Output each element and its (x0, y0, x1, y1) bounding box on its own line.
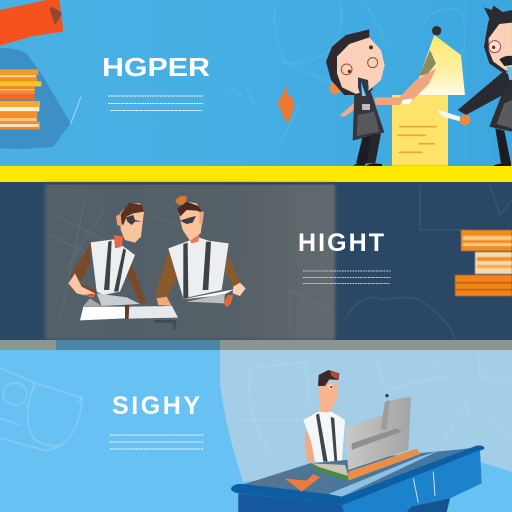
panel: top section background (0, 0, 512, 167)
characters: two men reading (68, 196, 246, 330)
body (489, 80, 512, 132)
character: right person (437, 5, 512, 166)
text block: middle (303, 271, 391, 284)
panel: bottom section background (0, 350, 512, 512)
background sketch lines top (230, 0, 466, 145)
illustration: orange shape and books (0, 0, 81, 149)
open book on table (80, 293, 183, 330)
torso (353, 87, 384, 141)
arm (458, 71, 512, 115)
hand (460, 115, 470, 125)
hand and paper (233, 283, 246, 296)
heading: HIGHT: HIGHT (298, 229, 384, 257)
upper paper (416, 35, 465, 95)
hand (374, 68, 436, 105)
illustration: book stack right (455, 230, 512, 296)
knife (437, 109, 460, 121)
heading: HGPER: HGPER (102, 52, 210, 82)
heading: SIGHY: SIGHY (112, 392, 200, 420)
right man (155, 196, 246, 307)
legs (495, 128, 511, 163)
text block: top (108, 96, 203, 110)
yellow document (392, 95, 448, 166)
dark silhouette (0, 48, 71, 149)
orange item on desk (284, 474, 320, 492)
hair and head (484, 5, 512, 72)
ear (329, 82, 341, 94)
text block: bottom (110, 435, 203, 449)
back arm (339, 103, 354, 117)
hair and head (326, 29, 373, 95)
divider: yellow band (0, 166, 512, 182)
man (303, 370, 345, 464)
panel: middle section background (0, 182, 512, 350)
icon: carrot (278, 83, 294, 122)
illustration: man at desk (231, 370, 484, 512)
desk (231, 446, 484, 512)
legs (356, 135, 373, 163)
orange keyboard pad (348, 449, 421, 481)
tie (358, 77, 369, 97)
orange shape (0, 0, 63, 46)
laptop (312, 394, 411, 476)
background sketch lines bottom (0, 368, 82, 451)
character: left person with papers (326, 26, 465, 166)
book stack (0, 69, 41, 129)
background sketch lines middle (50, 185, 512, 340)
left man (68, 203, 147, 303)
book (309, 464, 348, 481)
